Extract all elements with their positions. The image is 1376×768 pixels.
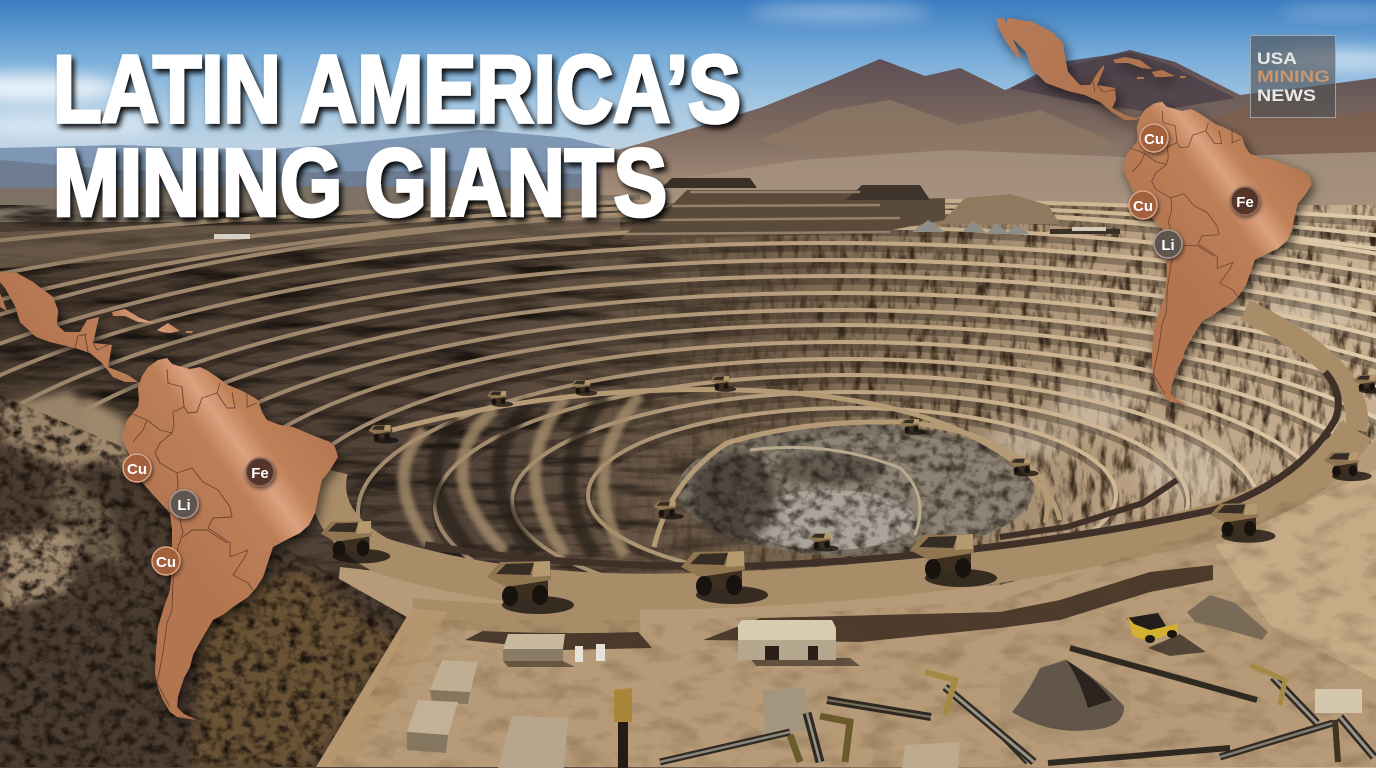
mine buildings — [407, 620, 1362, 768]
element badge: Li: Li — [177, 497, 191, 514]
title: MINING GIANTS — [53, 130, 667, 236]
element badge: Cu, Peru — [123, 454, 151, 482]
road into the yard — [316, 608, 448, 767]
element badge: Fe: Fe — [1236, 194, 1254, 211]
rock stockpiles — [1000, 595, 1268, 745]
pale rock patches on the lit pit wall — [990, 280, 1350, 500]
title: LATIN AMERICA’S — [53, 36, 741, 143]
element badge: Cu, Peru — [1129, 191, 1157, 219]
element badge: Cu, Chile: Cu — [156, 554, 176, 571]
haul trucks — [321, 375, 1376, 614]
background: distant mountains — [0, 50, 1376, 245]
element badge: Cu, Peru: Cu — [127, 461, 147, 478]
dark berms around the yard — [465, 565, 1213, 650]
rocky slope texture — [0, 390, 420, 768]
logo: USA Mining News: MINING — [1257, 67, 1330, 86]
inner bowl ridges — [404, 395, 640, 556]
element badge: Fe — [1231, 187, 1259, 215]
element badge: Fe: Fe — [251, 465, 269, 482]
element badge: Li — [1154, 230, 1182, 258]
background: sky — [0, 0, 1376, 230]
element badge: Cu, Chile — [152, 547, 180, 575]
upper rim benches — [0, 178, 1120, 268]
logo: USA Mining News — [1250, 36, 1336, 118]
map: Latin America, left copper version — [0, 272, 338, 720]
open pit: terraced bench faces — [0, 205, 1376, 768]
title — [53, 36, 741, 236]
yard texture — [320, 470, 1376, 768]
right map Mexico, Central America and Caribbean — [997, 18, 1186, 120]
map: Latin America, upper right copper version — [997, 18, 1312, 405]
bench ledges — [0, 200, 1376, 670]
logo: USA Mining News: NEWS — [1257, 86, 1316, 105]
yellow dump truck — [1127, 613, 1206, 656]
rock strata texture — [0, 205, 1376, 625]
element badge: Fe — [246, 458, 274, 486]
foreground ground — [0, 390, 1376, 767]
right map country borders — [1083, 74, 1241, 394]
element badge: Li — [170, 490, 198, 518]
left map shape — [0, 272, 338, 720]
right map South America shape — [1123, 102, 1312, 405]
element badge: Cu, Colombia — [1140, 124, 1168, 152]
logo: USA Mining News: USA — [1257, 49, 1297, 68]
pit floor: grey inner cone — [670, 420, 1040, 560]
left map country borders — [75, 334, 257, 707]
element badge: Cu, Peru: Cu — [1133, 198, 1153, 215]
element badge: Li: Li — [1161, 237, 1175, 254]
conveyors and processing plant — [660, 648, 1374, 763]
ring roads in the pit — [392, 390, 1060, 547]
haul road — [328, 310, 1357, 619]
element badge: Cu, Colombia: Cu — [1144, 131, 1164, 148]
